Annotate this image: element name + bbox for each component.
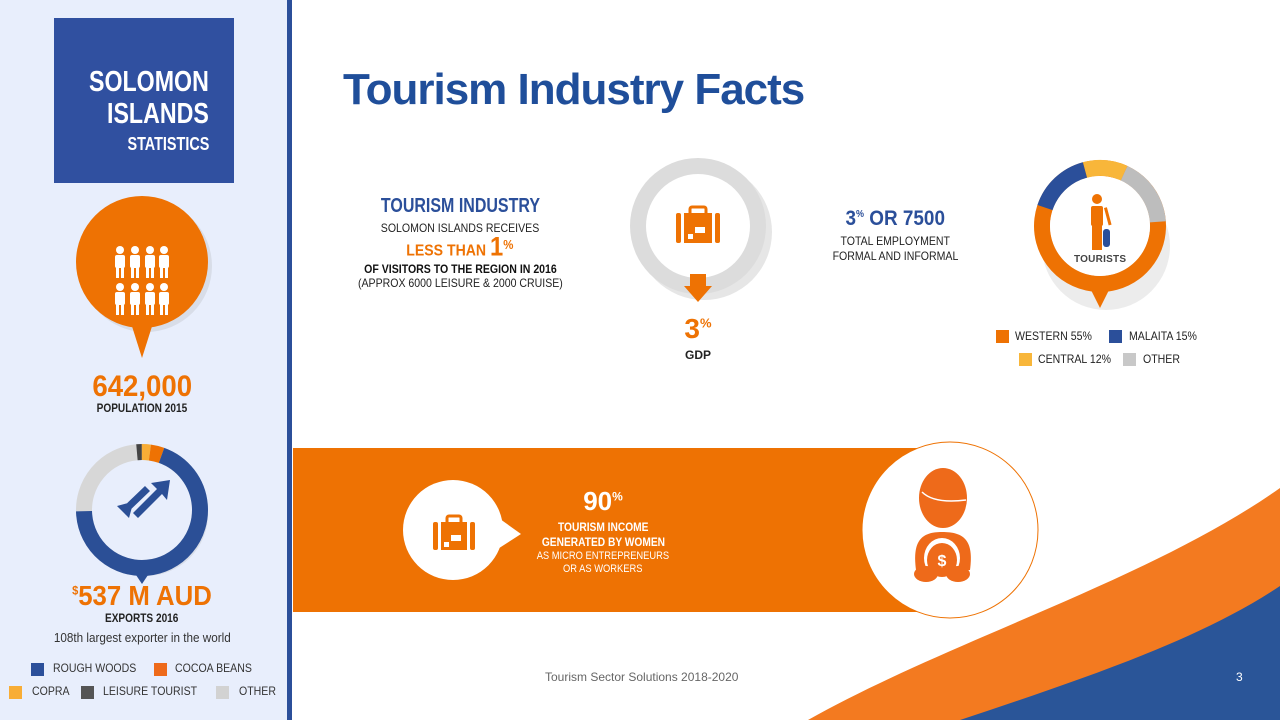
legend: exports: ROUGH WOODS [53,661,136,675]
text: 90% women income [536,486,669,575]
left panel [0,0,292,720]
text: 90% women income: AS MICRO ENTREPRENEURS [537,550,669,562]
text block: tourism industry: SOLOMON ISLANDS RECEIVES [381,221,539,235]
GDP label: GDP [685,348,711,362]
legend: tourists [996,329,1197,366]
icon: GDP ring with suitcase [630,158,772,302]
chart: tourists donut: TOURISTS [1074,254,1126,265]
text block: tourism industry: LESS THAN 1% [406,231,514,261]
title box: solomon islands statistics: SOLOMON [89,66,209,98]
legend: tourists: MALAITA 15% [1129,329,1197,343]
chart: tourists donut [1034,160,1170,310]
text block: employment: TOTAL EMPLOYMENT [840,234,950,248]
exports value: $537 M AUD [72,580,212,611]
legend: exports: COCOA BEANS [175,661,252,675]
population number: 642,000 [92,370,192,403]
main title: Tourism Industry Facts [343,65,804,114]
text: 90% women income: GENERATED BY WOMEN [541,535,665,549]
icon: woman with money bag [862,442,1038,618]
legend: tourists: WESTERN 55% [1015,329,1092,343]
tourist figure [1091,194,1112,250]
text block: employment: 3% OR 7500 [845,207,945,230]
page number: 3 [1236,670,1243,684]
exports subtext: 108th largest exporter in the world [54,630,230,645]
title box: solomon islands statistics: ISLANDS [107,98,209,130]
text block: tourism industry: OF VISITORS TO THE REGION IN 2016 [364,262,556,276]
text: 90% women income: TOURISM INCOME [558,520,648,534]
footer text: Tourism Sector Solutions 2018-2020 [545,670,738,684]
title box: solomon islands statistics [54,18,234,183]
legend: exports: OTHER [239,684,276,698]
legend: exports: COPRA [32,684,70,698]
icon: suitcase bubble [403,480,521,580]
GDP value: 3% [684,313,712,344]
legend: tourists: OTHER [1143,352,1180,366]
text: 90% women income: 90% [583,486,623,516]
icon: population bubble [76,196,212,358]
panel: orange banner women income [293,442,1038,618]
icon: woman with money bag: $ [938,553,947,570]
text block: tourism industry: TOURISM INDUSTRY [380,195,540,217]
title box: solomon islands statistics: STATISTICS [127,134,209,154]
arrows [117,480,170,518]
chart: exports donut [76,444,208,584]
population label: POPULATION 2015 [97,401,187,415]
text block: employment [832,207,958,263]
legend: exports [9,661,276,699]
text: 90% women income: OR AS WORKERS [563,563,643,575]
exports label: EXPORTS 2016 [105,611,179,625]
legend: exports: LEISURE TOURIST [103,684,197,698]
text block: tourism industry [358,195,562,290]
legend: tourists: CENTRAL 12% [1038,352,1111,366]
text block: employment: FORMAL AND INFORMAL [832,249,958,263]
text block: tourism industry: (APPROX 6000 LEISURE & 2000 CRUISE) [358,276,562,290]
